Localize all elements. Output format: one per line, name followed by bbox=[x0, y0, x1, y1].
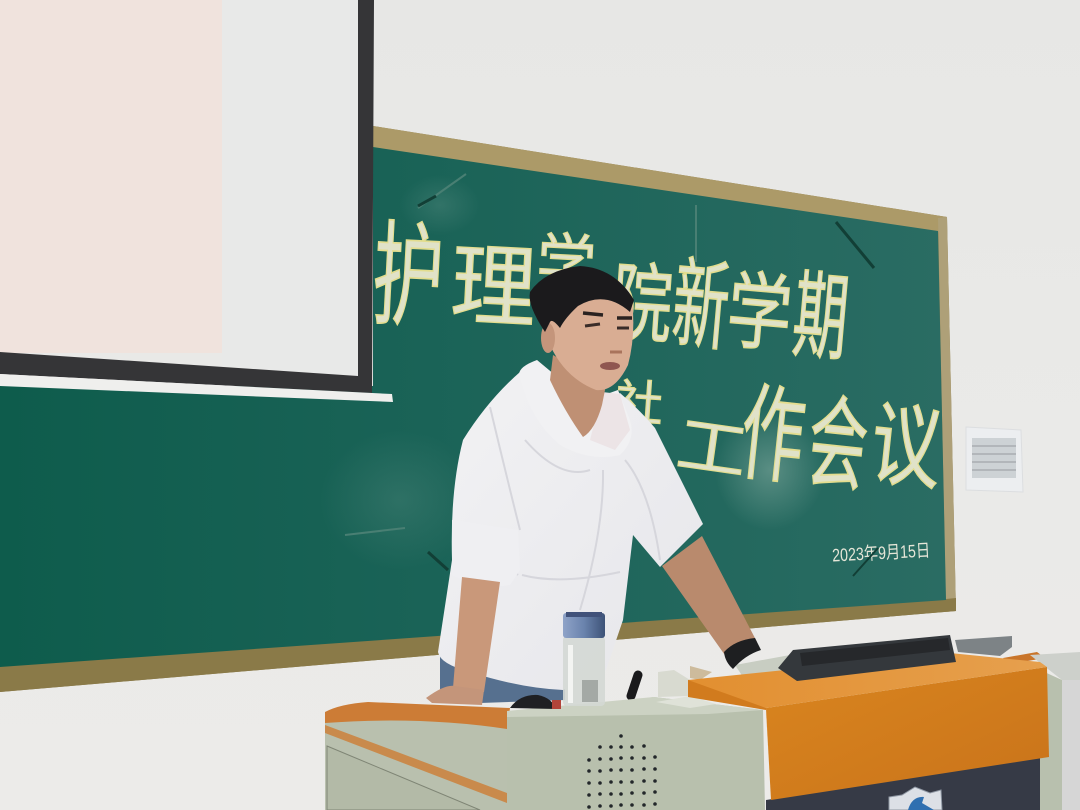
heading: chalk title line 1: 学 bbox=[535, 228, 598, 304]
heading: chalk title line 1 bbox=[370, 212, 853, 373]
orange strip on wall side bbox=[1003, 652, 1045, 664]
left curved wooden rail bbox=[325, 702, 510, 729]
inner hood lining bbox=[590, 392, 630, 450]
logo badge bbox=[889, 787, 942, 810]
left rolled sleeve bbox=[452, 520, 520, 586]
hair bbox=[530, 266, 634, 332]
panel: notice sheet on wall bbox=[966, 427, 1023, 492]
orange wooden top bbox=[688, 653, 1047, 708]
dark lower front bbox=[766, 758, 1040, 810]
cabinet door bbox=[327, 746, 480, 810]
heading: chalk title line 1: 新 bbox=[668, 249, 734, 363]
left hand bbox=[426, 686, 484, 705]
hoodie seams and folds bbox=[490, 407, 660, 610]
face bbox=[548, 294, 633, 390]
heading: chalk title line 1: 院 bbox=[609, 255, 675, 355]
heading: chalk title line 1: 护 bbox=[370, 212, 447, 343]
text: chalk date bbox=[832, 540, 931, 576]
orange wooden front bbox=[766, 667, 1049, 800]
neck bbox=[550, 355, 606, 437]
heading: chalk title line 2: 工 bbox=[672, 410, 751, 489]
panel: projection screen bbox=[0, 0, 393, 402]
heading: chalk title line 1: 理 bbox=[449, 236, 539, 340]
heading: chalk title line 1: 期 bbox=[789, 263, 853, 373]
icon: wristwatch bbox=[724, 638, 761, 669]
right arm bbox=[662, 536, 757, 658]
ear bbox=[541, 323, 555, 353]
key fob bbox=[631, 675, 638, 696]
centre speaker panel bbox=[507, 697, 765, 810]
hoodie body bbox=[438, 372, 703, 690]
icon: water bottle bbox=[563, 612, 605, 706]
far right column bbox=[1030, 652, 1080, 810]
brows, eyes, nose and mouth bbox=[583, 313, 632, 318]
heading: chalk title line 2: 社 bbox=[613, 376, 665, 433]
paper holder and cream card bbox=[658, 670, 690, 697]
left forearm bbox=[453, 577, 500, 692]
panel: podium bbox=[325, 635, 1080, 810]
heading: chalk title line 2: 会 bbox=[802, 386, 873, 505]
person: speaker in white hoodie bbox=[426, 266, 757, 705]
lower left cabinet bbox=[325, 714, 508, 810]
text: chalk date: 2023年9月15日 bbox=[832, 540, 931, 565]
display bar bbox=[778, 635, 956, 681]
jeans bbox=[440, 655, 565, 703]
heading: chalk title line 1: 学 bbox=[723, 263, 796, 363]
heading: chalk title line 2: 作 bbox=[735, 376, 810, 498]
hoodie hood and collar bbox=[519, 360, 632, 457]
monitor behind the desk bbox=[955, 636, 1012, 656]
wooden stripe bbox=[325, 725, 507, 803]
speaker grille bbox=[587, 734, 657, 809]
icon: computer mouse bbox=[510, 695, 561, 709]
heading: chalk title line 2 bbox=[613, 376, 946, 505]
heading: chalk title line 2: 议 bbox=[866, 394, 946, 502]
paper label bbox=[656, 696, 716, 708]
document tablet bbox=[735, 655, 795, 680]
panel: chalkboard bbox=[0, 126, 956, 692]
